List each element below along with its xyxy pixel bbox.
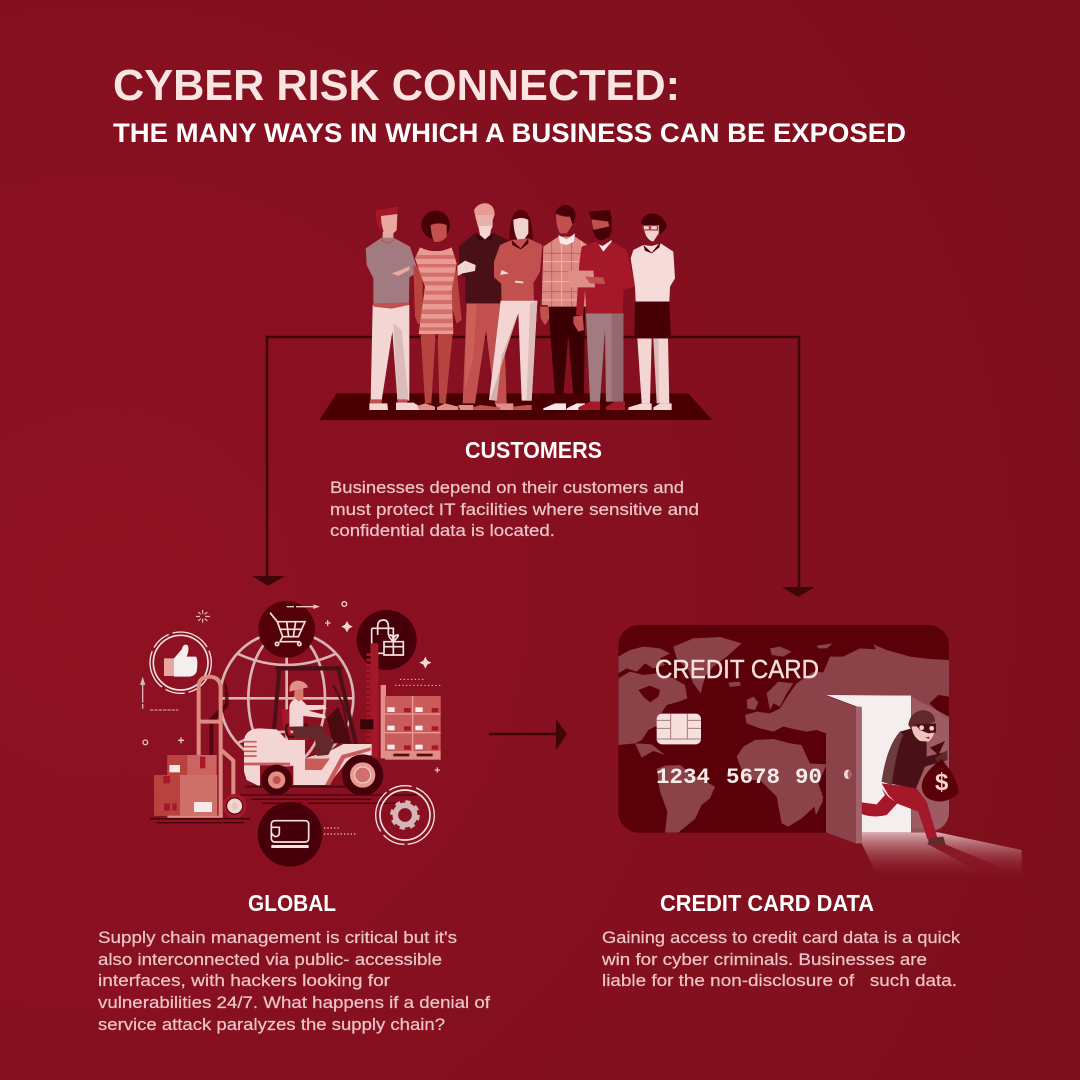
text: global description: Supply chain management is critical but it's — [98, 929, 457, 947]
heading: credit card data: CREDIT CARD DATA — [660, 890, 874, 916]
connector arrows from customers to global and credit card — [252, 337, 815, 597]
card number text — [656, 765, 822, 790]
person 4 — [489, 210, 542, 401]
open doorway — [826, 695, 949, 833]
icon: shopping bag and gift — [357, 610, 417, 670]
person 2 — [413, 211, 462, 410]
illustration: credit card and thief — [618, 625, 1022, 878]
text: global description: interfaces, with hackers looking for — [98, 972, 391, 990]
title: THE MANY WAYS IN WHICH A BUSINESS CAN BE EXPOSED — [113, 118, 906, 148]
icon: shopping cart — [258, 601, 315, 658]
forklift — [240, 643, 441, 803]
text: customers description: must protect IT facilities where sensitive and — [330, 501, 699, 519]
person 3 — [457, 203, 532, 410]
thief — [862, 710, 958, 845]
arrow: global to credit card — [489, 719, 567, 750]
person 5 — [540, 205, 592, 410]
card label text: CREDIT CARD — [655, 654, 819, 684]
credit card — [618, 625, 949, 833]
decorations: sparkles, arrows, dots — [140, 602, 443, 773]
door leaf — [826, 696, 862, 843]
text: credit card description: liable for the non-disclosure of such data. — [602, 972, 957, 990]
text: credit card description — [601, 929, 961, 990]
text: global description — [98, 929, 490, 1034]
text: credit card description: Gaining access to credit card data is a quick — [602, 929, 961, 947]
title — [113, 61, 906, 148]
illustration: global supply chain — [140, 601, 443, 867]
icon: thumbs up — [150, 632, 211, 693]
text: global description: service attack paralyzes the supply chain? — [98, 1016, 445, 1034]
floor light — [862, 832, 1022, 878]
hand truck and boxes — [150, 677, 250, 823]
EMV chip — [657, 714, 701, 744]
icon: credit card circle — [258, 802, 357, 867]
text: global description: also interconnected via public- accessible — [98, 951, 442, 969]
person 1 — [366, 207, 422, 410]
person 6 — [567, 210, 635, 410]
title: CYBER RISK CONNECTED: — [113, 61, 680, 110]
text: customers description: confidential data is located. — [330, 522, 555, 540]
card number text: 1234 — [656, 765, 710, 790]
person 7 — [628, 213, 675, 410]
text: customers description — [330, 479, 699, 540]
card number text: 90 — [795, 765, 822, 790]
heading: global: GLOBAL — [248, 890, 336, 916]
icon: gear — [376, 786, 434, 844]
globe — [220, 632, 353, 765]
world map — [618, 637, 949, 833]
text: credit card description: win for cyber criminals. Businesses are — [601, 951, 927, 969]
text: customers description: Businesses depend on their customers and — [330, 479, 684, 497]
heading: customers: CUSTOMERS — [465, 437, 602, 463]
thief: $ — [935, 769, 948, 796]
illustration: group of customers — [319, 203, 712, 420]
card number text: 5678 — [726, 765, 780, 790]
platform — [319, 393, 712, 420]
text: global description: vulnerabilities 24/7. What happens if a denial of — [98, 994, 490, 1012]
